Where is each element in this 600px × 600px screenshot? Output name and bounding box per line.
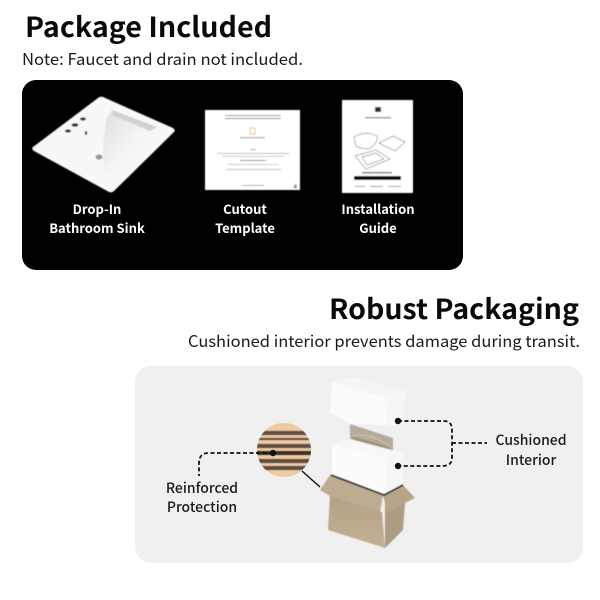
label: cushioned interior: Interior: [506, 450, 556, 470]
icon: corrugated cardboard magnifier: [255, 423, 320, 487]
note: faucet and drain: Note: Faucet and drain not included.: [22, 46, 303, 70]
label: installation guide: Guide: [359, 218, 397, 237]
icon: exploded box with foam: [320, 377, 415, 548]
panel: packaging diagram: [135, 366, 583, 563]
label: cushioned interior: Cushioned: [495, 430, 567, 450]
panel: package contents: [22, 80, 463, 270]
label: drop-in bathroom sink: Bathroom Sink: [49, 218, 145, 237]
subheading: cushioned interior: Cushioned interior prevents damage during transit.: [188, 328, 580, 352]
callout: cushioned interior connector: [395, 418, 487, 469]
heading: Robust Packaging: Robust Packaging: [329, 288, 579, 328]
label: cutout template: Cutout: [223, 199, 267, 218]
icon: cutout template sheet: [205, 110, 300, 190]
top foam block: [330, 377, 405, 425]
icon: drop-in sink: [32, 97, 175, 192]
sink in foam: [350, 424, 393, 456]
label: reinforced protection: Protection: [167, 497, 237, 517]
cardboard box: [320, 475, 415, 548]
label: installation guide: Installation: [341, 199, 415, 218]
label: reinforced protection: Reinforced: [166, 478, 238, 498]
title: Package Included: Package Included: [25, 6, 272, 46]
icon: installation guide booklet: [342, 100, 413, 193]
lower foam block: [332, 439, 403, 495]
label: drop-in bathroom sink: Drop-In: [73, 199, 121, 218]
callout: reinforced protection connector: [199, 450, 276, 476]
label: cutout template: Template: [215, 218, 275, 237]
